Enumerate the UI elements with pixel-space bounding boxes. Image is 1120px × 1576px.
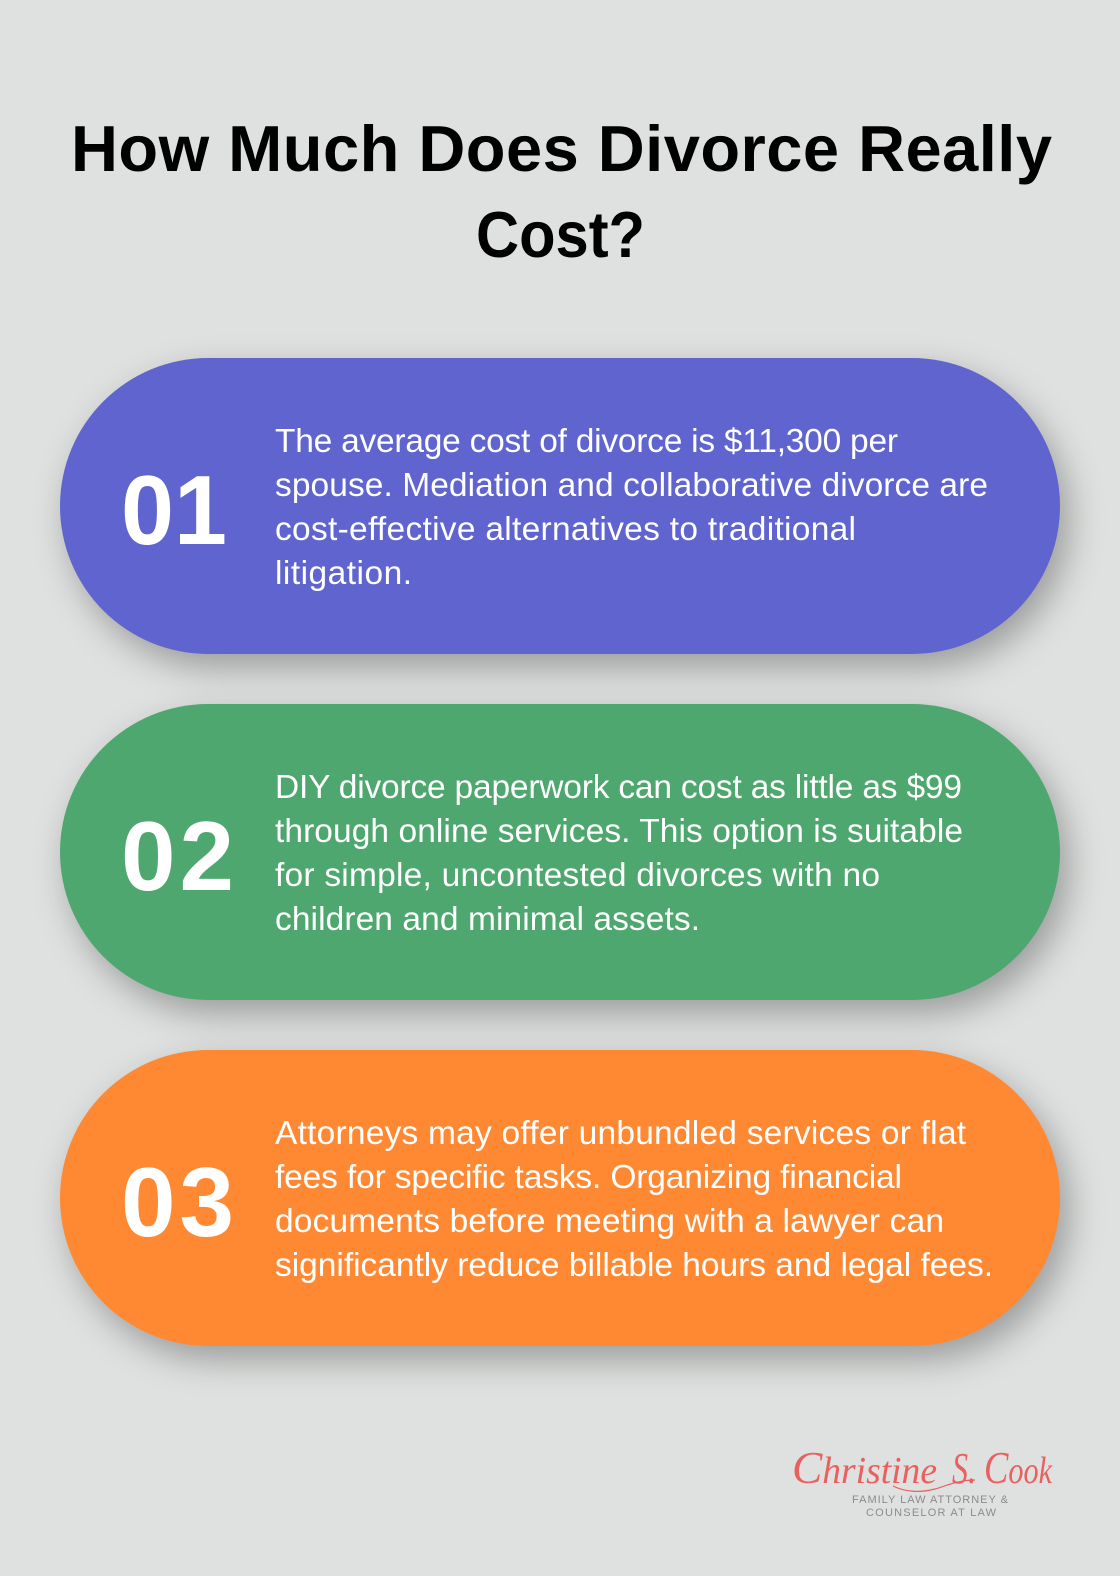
pill background 01 [60, 358, 1060, 654]
text block 01: cost-effective alternatives to traditional [275, 511, 856, 548]
text block 02: DIY divorce paperwork can cost as little as $99 [275, 769, 962, 806]
panel: step 03 [60, 1050, 1060, 1346]
text block 02 [275, 769, 963, 938]
text block 03: significantly reduce billable hours and legal fees. [275, 1247, 993, 1284]
text block 01 [275, 423, 988, 592]
number 01: 01 [121, 455, 227, 565]
title: How Much Does Divorce Really [71, 112, 1052, 185]
logo: Christine S. Cook: Cook [984, 1442, 1053, 1493]
title [71, 112, 1052, 271]
text block 01: The average cost of divorce is $11,300 per [275, 423, 898, 460]
text block 01: litigation. [275, 555, 412, 592]
panel: step 01 [60, 358, 1060, 654]
pill background 03 [60, 1050, 1060, 1346]
text block 03: Attorneys may offer unbundled services or flat [275, 1115, 967, 1152]
logo: Christine S. Cook: S. [952, 1444, 976, 1493]
text block 02: children and minimal assets. [275, 901, 700, 938]
panel: step 02 [60, 704, 1060, 1000]
text block 02: for simple, uncontested divorces with no [275, 857, 880, 894]
text block 02: through online services. This option is suitable [275, 813, 963, 850]
pill background 02 [60, 704, 1060, 1000]
number 02: 02 [121, 801, 234, 911]
text block 03 [275, 1115, 993, 1284]
number 03: 03 [121, 1147, 234, 1257]
logo: Christine S. Cook: Christine [792, 1442, 937, 1493]
text block 03: fees for specific tasks. Organizing financial [275, 1159, 902, 1196]
logo: Christine S. Cook: COUNSELOR AT LAW [866, 1507, 997, 1519]
title: Cost? [476, 198, 645, 271]
logo: Christine S. Cook [792, 1442, 1053, 1519]
logo: Christine S. Cook: FAMILY LAW ATTORNEY & [852, 1494, 1009, 1506]
text block 01: spouse. Mediation and collaborative divorce are [275, 467, 988, 504]
text block 03: documents before meeting with a lawyer can [275, 1203, 944, 1240]
